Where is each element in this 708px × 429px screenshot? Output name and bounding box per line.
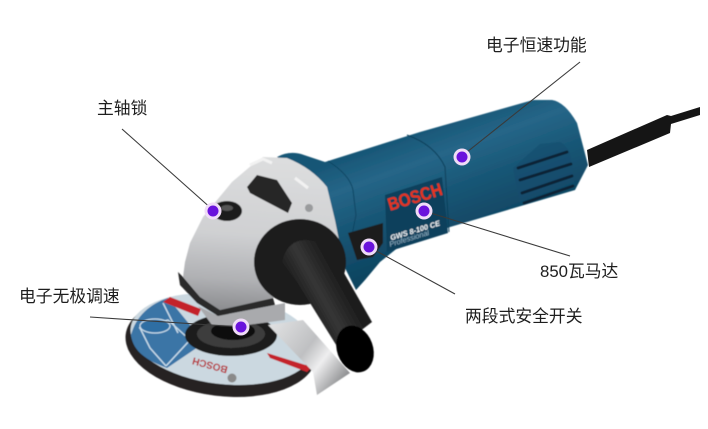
brand plate: Professional: [388, 228, 431, 249]
brand plate: GWS 8-100 CE: [389, 218, 442, 242]
marker: 850 watt motor: [416, 202, 570, 256]
label: spindle lock: 主轴锁: [97, 99, 148, 118]
power cord: [587, 107, 700, 167]
marker: spindle lock: [122, 129, 222, 220]
spindle collar: [198, 303, 285, 326]
label: stepless speed control: 电子无极调速: [19, 287, 120, 306]
brand plate: BOSCH: [385, 179, 445, 215]
silver gear head: [183, 157, 345, 310]
brand plate: [385, 177, 448, 252]
vents: [518, 152, 573, 203]
label: electronic constant speed: 电子恒速功能: [486, 36, 587, 55]
marker: electronic constant speed: [454, 62, 580, 166]
label: two-stage safety switch: 两段式安全开关: [465, 307, 583, 326]
label: 850 watt motor: 850瓦马达: [540, 262, 619, 281]
side handle: [254, 219, 380, 378]
switch: [348, 223, 383, 260]
marker: stepless speed control: [90, 317, 250, 336]
disc text: BOSCH: [191, 355, 229, 375]
blue motor body: [277, 100, 588, 290]
air window: [247, 175, 292, 213]
marker: two-stage safety switch: [360, 238, 455, 294]
guard: [268, 320, 350, 395]
spindle lock button: [212, 201, 242, 221]
grinding disc: [120, 283, 322, 407]
black band: [178, 272, 275, 316]
angle grinder illustration: [120, 100, 588, 407]
